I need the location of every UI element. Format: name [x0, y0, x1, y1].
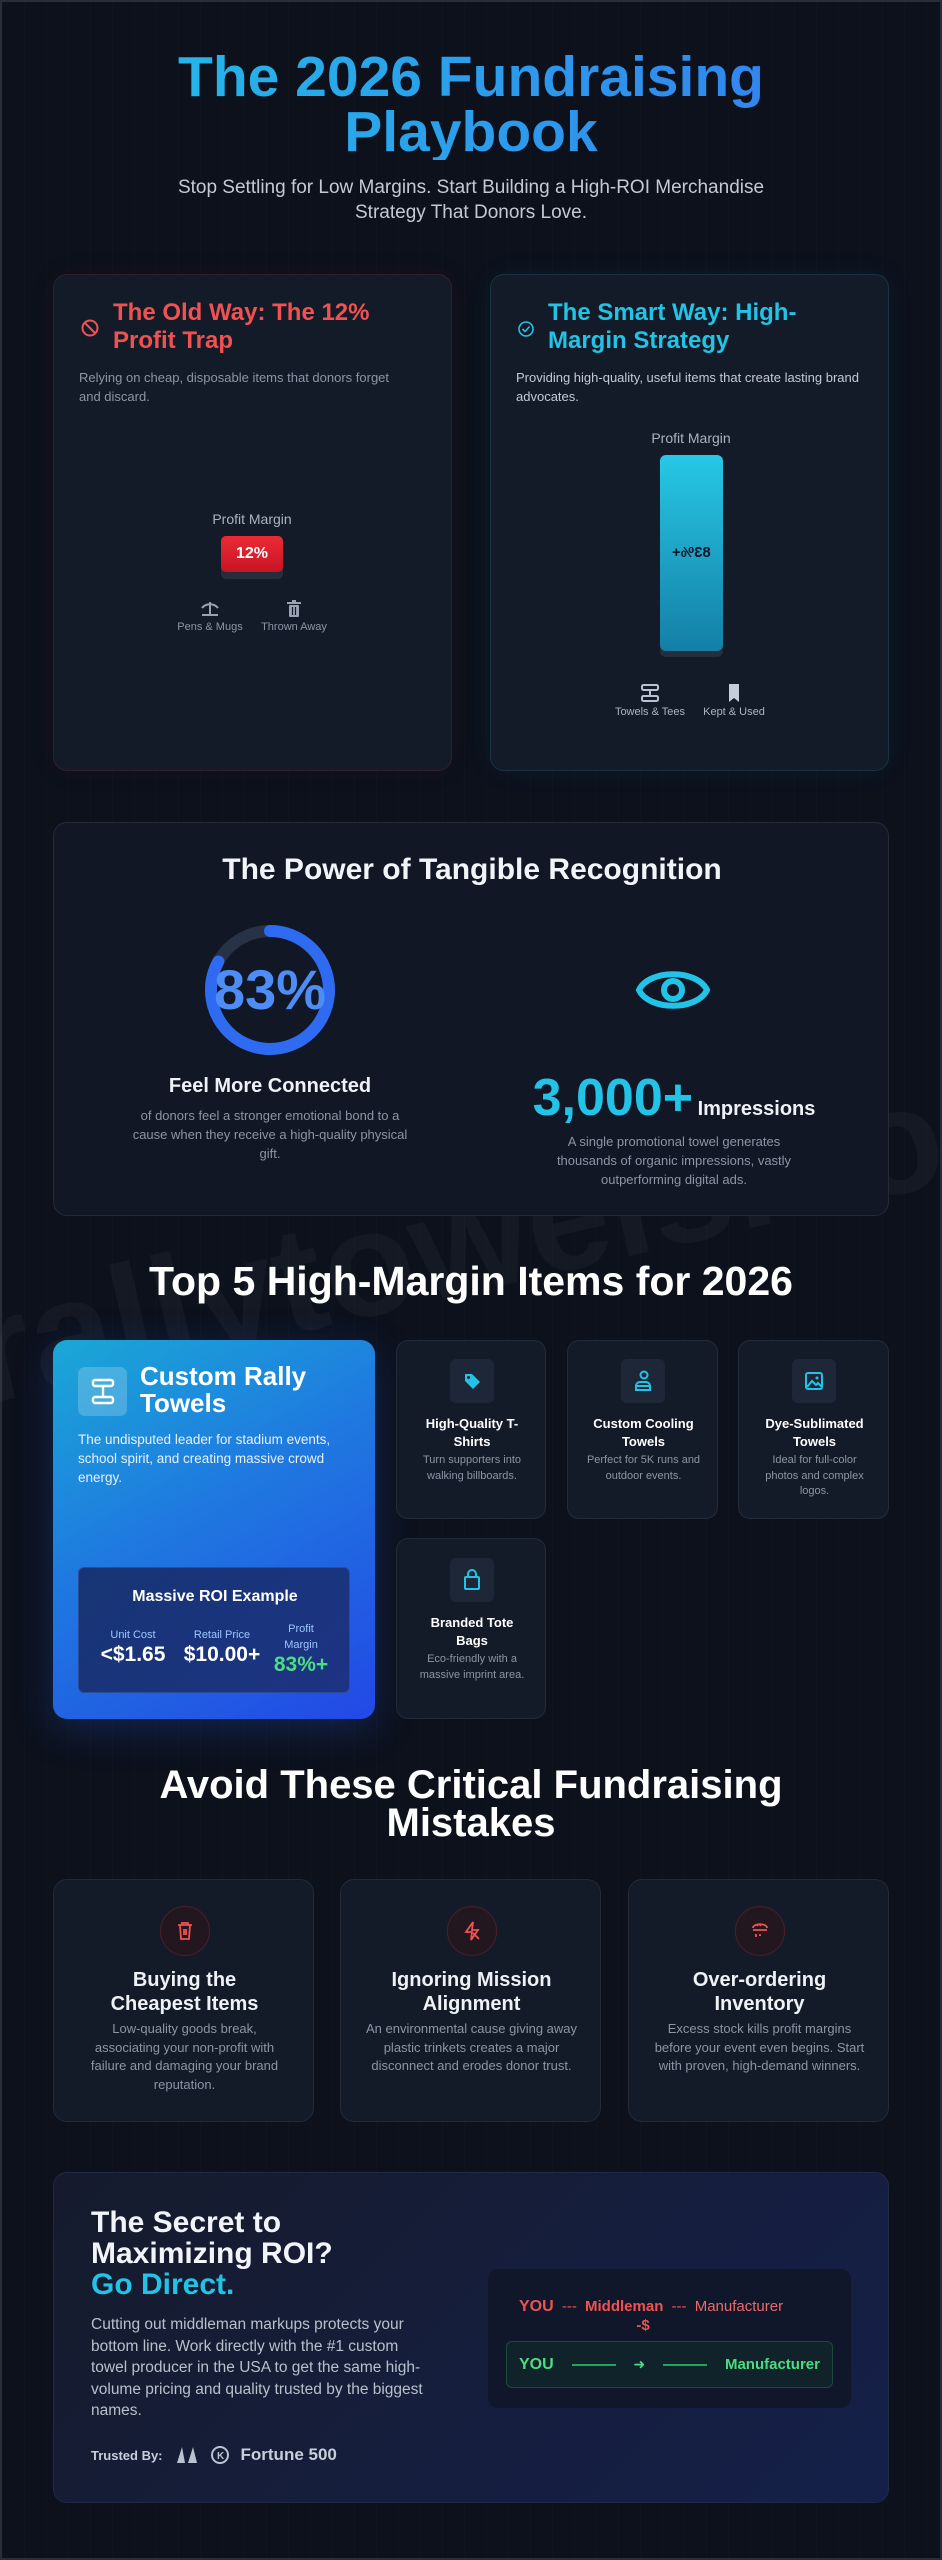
heading: old way: The Old Way: The 12% Profit Trap	[113, 299, 370, 354]
icon: inventory	[735, 1906, 785, 1956]
chart: 12% bar: Profit Margin	[212, 511, 292, 527]
card: mission alignment: Ignoring Mission Alignment	[392, 1969, 552, 2015]
icon: tag	[450, 1359, 494, 1403]
panel: smart way	[490, 274, 889, 771]
text: old way desc: Relying on cheap, disposable items that donors forget and discard.	[79, 370, 389, 404]
card: t-shirts: High-Quality T-Shirts	[426, 1416, 518, 1449]
trusted by: Fortune 500	[241, 2445, 337, 2464]
card: tote bags	[396, 1538, 546, 1719]
heading: avoid mistakes: Mistakes	[386, 1801, 555, 1845]
trusted by: K	[217, 2451, 225, 2462]
icon: pens & mugs: Pens & Mugs	[177, 621, 243, 633]
callout: ROI example: $10.00+	[184, 1643, 260, 1666]
title	[0, 50, 942, 160]
row: direct path: YOU	[519, 2356, 554, 2372]
chart: 83% ring: 83%	[214, 958, 326, 1021]
panel: power of tangible recognition	[53, 822, 889, 1216]
text: body: Cutting out middleman markups protects your bottom line. Work directly with the #1 custom towel producer in the USA to get the same high-volume pricing and quality trusted by the biggest names.	[91, 2316, 423, 2419]
callout: ROI example: Unit Cost	[110, 1629, 156, 1641]
icon: trash	[160, 1906, 210, 1956]
diagram: supply chain: -$	[636, 2317, 650, 2334]
heading: secret	[91, 2206, 333, 2301]
chart: 12% bar	[212, 511, 292, 579]
icon: bag	[450, 1558, 494, 1602]
callout: ROI example: Retail Price	[194, 1629, 250, 1641]
icon: pens & mugs	[177, 602, 243, 633]
icon: towels & tees: Towels & Tees	[615, 706, 685, 718]
icon: towel	[78, 1367, 127, 1416]
card: cheapest items: Low-quality goods break, associating your non-profit with failure and damaging your brand reputation.	[91, 2021, 278, 2092]
callout: ROI example: <$1.65	[101, 1643, 165, 1666]
subtitle: Strategy That Donors Love.	[355, 202, 587, 223]
chart: 83% bar: 83%+	[672, 544, 710, 561]
row: direct path	[506, 2341, 833, 2388]
icon: ban	[82, 320, 98, 336]
heading: secret: Go Direct.	[91, 2268, 234, 2301]
icon: eye	[636, 971, 710, 1009]
card: mission alignment: An environmental cause giving away plastic trinkets creates a major disconnect and erodes donor trust.	[366, 2021, 577, 2073]
card: dye-sublimated: Dye-Sublimated Towels	[765, 1416, 864, 1449]
callout: ROI example: Profit	[288, 1623, 314, 1635]
icon: check	[518, 321, 534, 337]
card: over-ordering: Over-ordering Inventory	[693, 1969, 826, 2015]
stat: 3000+ impressions: A single promotional towel generates thousands of organic impressions, vastly outperforming digital ads.	[557, 1134, 791, 1187]
card: over-ordering	[628, 1879, 889, 2122]
heading: top 5: Top 5 High-Margin Items for 2026	[149, 1258, 793, 1304]
callout: ROI example: Margin	[284, 1639, 318, 1651]
row: middleman path: YOU --- Middleman --- Manufacturer	[519, 2298, 783, 2315]
title: The 2026 Fundraising	[178, 45, 764, 109]
card: cooling towels	[567, 1340, 718, 1519]
subtitle: Stop Settling for Low Margins. Start Building a High-ROI Merchandise	[178, 177, 764, 198]
diagram: supply chain	[488, 2269, 851, 2408]
callout: ROI example: 83%+	[274, 1653, 328, 1676]
trusted by: Trusted By:	[91, 2448, 163, 2462]
callout: ROI example	[78, 1567, 350, 1693]
heading: avoid mistakes: Avoid These Critical Fundraising	[159, 1763, 783, 1807]
text: feel more connected: Feel More Connected	[169, 1075, 371, 1097]
chart: 83% ring	[205, 925, 335, 1055]
heading: Custom Rally Towels	[140, 1361, 306, 1418]
text: smart way desc: Providing high-quality, useful items that create lasting brand advocates.	[516, 370, 859, 404]
panel: old way	[53, 274, 452, 771]
icon: person	[621, 1359, 665, 1403]
stat: 3000+ impressions: 3,000+ Impressions	[533, 1069, 815, 1127]
card: over-ordering: Excess stock kills profit margins before your event even begins. Start with proven, high-demand winners.	[655, 2021, 864, 2073]
card: cheapest items: Buying the Cheapest Items	[111, 1969, 258, 2015]
heading: smart way: The Smart Way: High-Margin Strategy	[548, 299, 796, 354]
icon: kept & used: Kept & Used	[703, 706, 765, 718]
panel: go direct	[53, 2172, 889, 2503]
chart: 83% bar	[651, 430, 731, 657]
row: direct path: Manufacturer	[725, 2356, 820, 2373]
icon: thrown away	[261, 600, 327, 633]
card: cheapest items	[53, 1879, 314, 2122]
card: cooling towels: Perfect for 5K runs and outdoor events.	[587, 1454, 700, 1482]
chart: 83% bar: Profit Margin	[651, 430, 731, 446]
card: mission alignment	[340, 1879, 601, 2122]
heading: secret: The Secret to Maximizing ROI?	[91, 2206, 333, 2270]
card: custom rally towels	[53, 1340, 375, 1719]
trusted by	[91, 2445, 337, 2464]
icon: towels & tees	[615, 684, 685, 718]
heading: avoid mistakes	[159, 1763, 783, 1845]
callout: ROI example: Massive ROI Example	[132, 1588, 298, 1605]
row: direct path: ➜	[633, 2356, 645, 2372]
card: t-shirts	[396, 1340, 546, 1519]
text: feel more connected: of donors feel a stronger emotional bond to a cause when they receive a high-quality physical gift.	[133, 1108, 407, 1161]
icon: zap off	[447, 1906, 497, 1956]
stat: 3000+ impressions	[533, 1069, 815, 1187]
heading: The Power of Tangible Recognition	[222, 853, 722, 886]
card: dye-sublimated: Ideal for full-color photos and complex logos.	[765, 1454, 864, 1497]
icon: thrown away: Thrown Away	[261, 621, 327, 633]
card: t-shirts: Turn supporters into walking billboards.	[423, 1454, 521, 1482]
card: dye-sublimated	[738, 1340, 889, 1519]
icon: image	[792, 1359, 836, 1403]
chart: 12% bar: 12%	[236, 545, 268, 562]
title: Playbook	[344, 100, 598, 164]
subtitle	[178, 177, 764, 223]
card: tote bags: Branded Tote Bags	[431, 1615, 513, 1648]
icon: kept & used	[703, 684, 765, 718]
text: The undisputed leader for stadium events, school spirit, and creating massive crowd energy.	[78, 1432, 330, 1485]
text: feel more connected	[133, 1075, 407, 1161]
card: cooling towels: Custom Cooling Towels	[593, 1416, 694, 1449]
card: tote bags: Eco-friendly with a massive imprint area.	[420, 1653, 524, 1680]
